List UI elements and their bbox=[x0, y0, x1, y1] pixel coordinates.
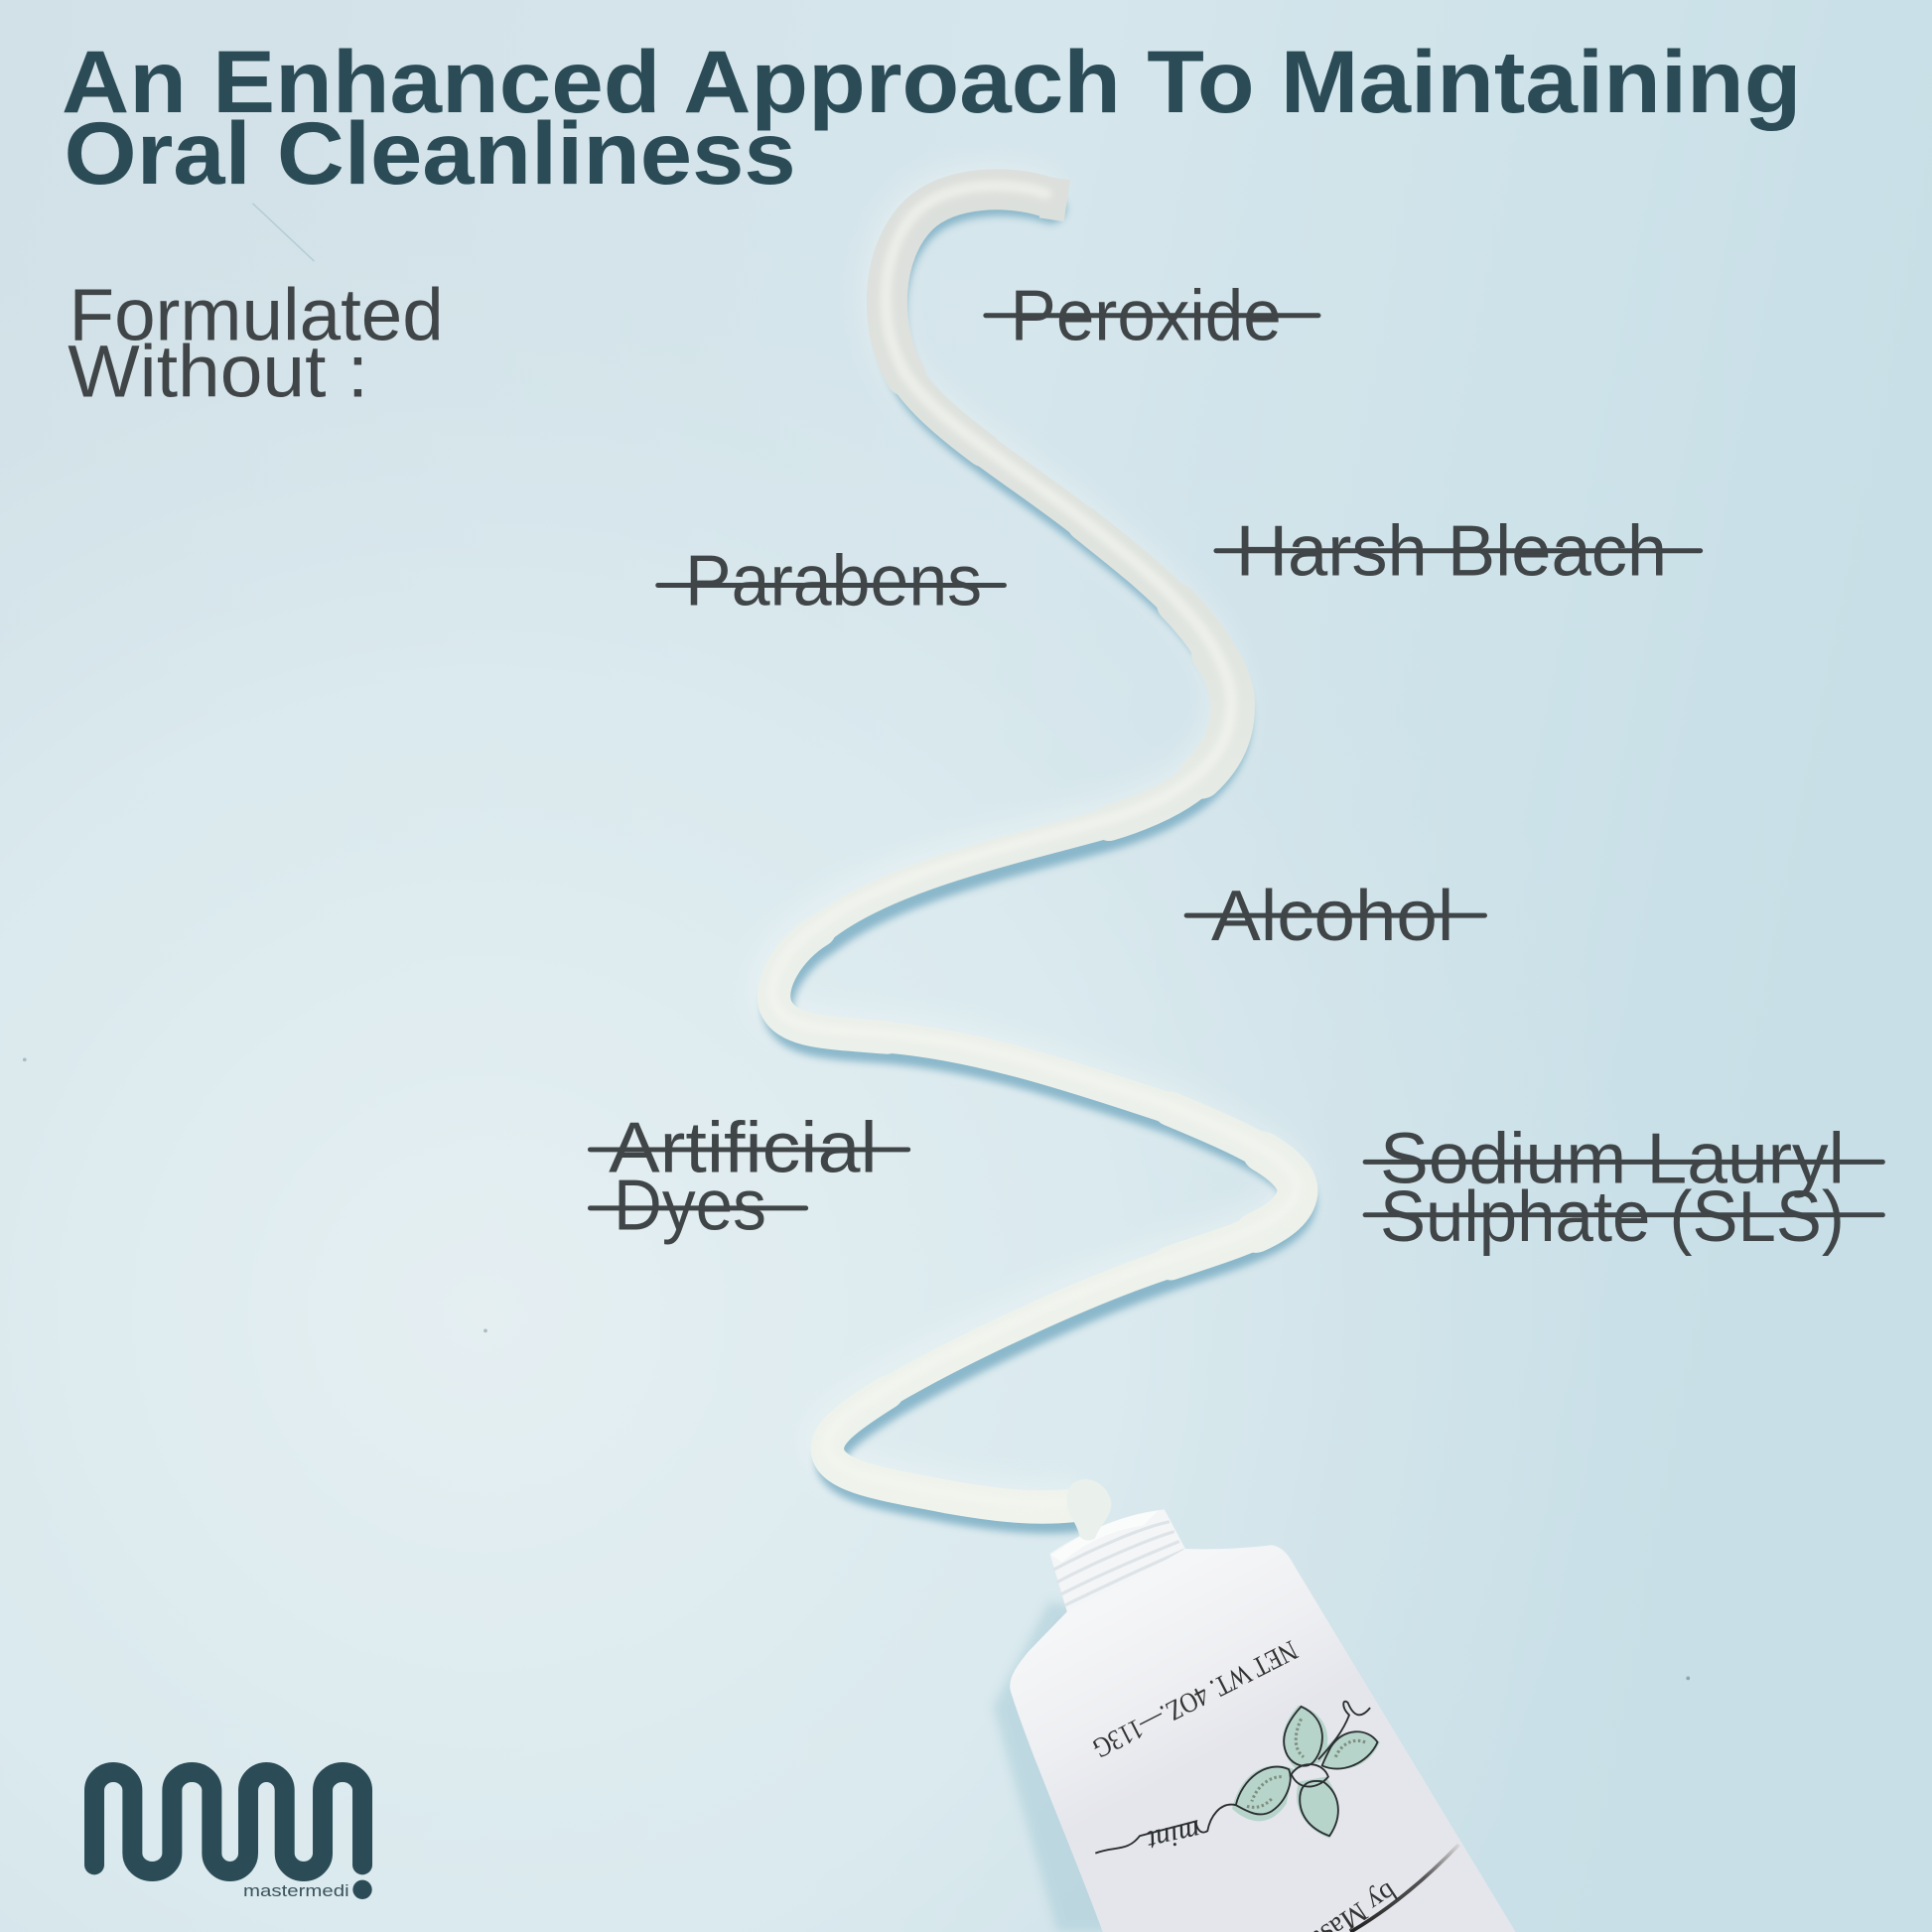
title bbox=[62, 32, 1801, 203]
strikethrough label: Parabens: Parabens bbox=[685, 541, 982, 621]
title: An Enhanced Approach To Maintaining bbox=[62, 32, 1801, 131]
strikethrough label: Sodium Lauryl Sulphate (SLS): Sodium Lauryl bbox=[1380, 1119, 1845, 1198]
strikethrough label: Sodium Lauryl Sulphate (SLS): Sulphate (SLS) bbox=[1380, 1177, 1845, 1257]
paste nozzle blob bbox=[1066, 1479, 1111, 1541]
strikethrough label: Harsh Bleach: Harsh Bleach bbox=[1236, 512, 1667, 592]
tube body bbox=[1010, 1545, 1516, 1932]
mint script: mint bbox=[1144, 1814, 1203, 1858]
title: Oral Cleanliness bbox=[65, 103, 796, 203]
net weight label: NET WT. 4OZ.—113G bbox=[1087, 1634, 1303, 1763]
silver band bbox=[1350, 1845, 1458, 1932]
strikethrough label: Artificial Dyes bbox=[588, 1108, 910, 1246]
toothpaste tube bbox=[993, 1479, 1516, 1932]
subheading: formulated without: Formulated bbox=[69, 274, 444, 356]
tube neck with threads bbox=[1049, 1509, 1201, 1626]
subheading: formulated without bbox=[68, 274, 444, 413]
mint illustration bbox=[1095, 1702, 1380, 1854]
strikethrough label: Artificial Dyes: Artificial bbox=[609, 1108, 878, 1187]
logo wordmark: mastermedi bbox=[243, 1881, 349, 1900]
strikethrough label: Sodium Lauryl Sulphate (SLS) bbox=[1363, 1119, 1885, 1257]
strikethrough label: Artificial Dyes: Dyes bbox=[614, 1167, 766, 1246]
subheading: formulated without: Without : bbox=[68, 331, 368, 413]
logo: mastermedi bbox=[94, 1772, 372, 1900]
logo wave mark bbox=[94, 1772, 362, 1871]
strikethrough label: Peroxide: Peroxide bbox=[1011, 277, 1282, 356]
tube shadow bbox=[993, 1601, 1115, 1932]
toothpaste ribbon bbox=[767, 182, 1302, 1518]
strikethrough label: Alcohol: Alcohol bbox=[1211, 877, 1453, 956]
logo dot bbox=[352, 1880, 372, 1899]
